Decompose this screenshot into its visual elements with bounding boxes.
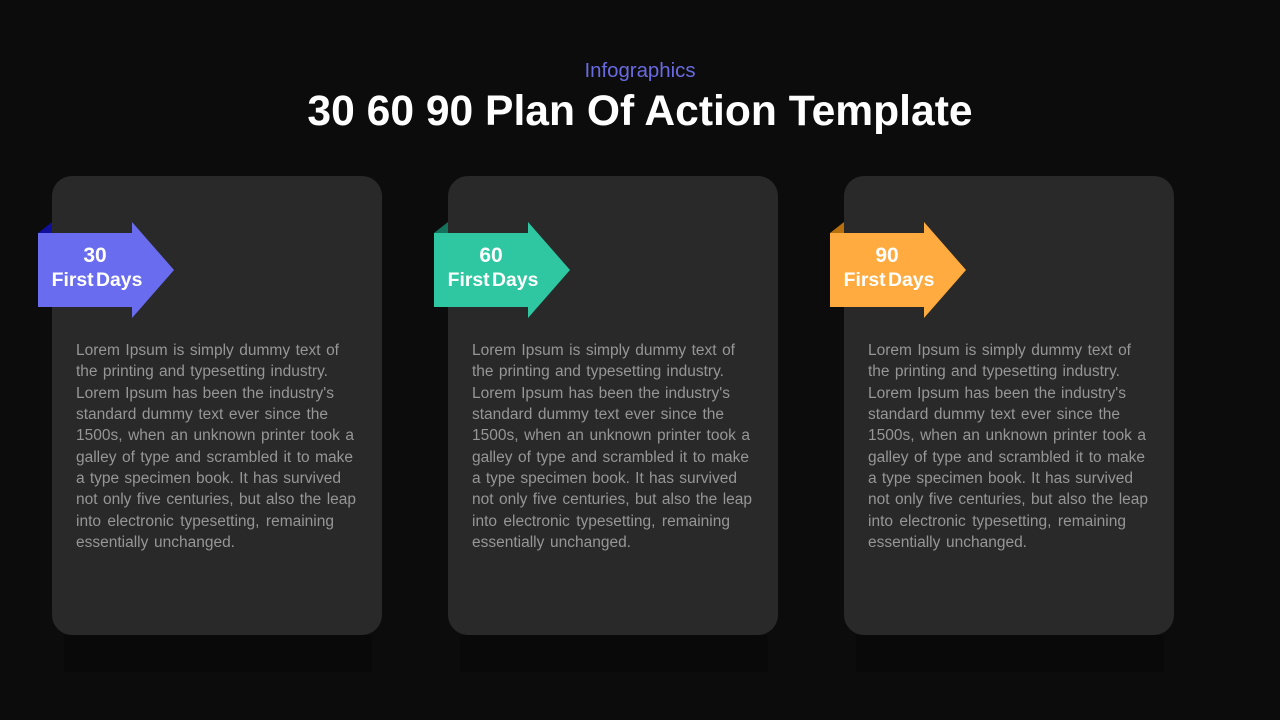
arrow label: First Days <box>448 269 538 291</box>
text block: 90 days: 1500s, when an unknown printer took a <box>868 427 1146 444</box>
text block: 60 days <box>472 342 752 551</box>
arrow: 90 first days <box>830 222 966 318</box>
arrow: 60 first days <box>434 222 570 318</box>
arrow number: 30 <box>83 244 107 267</box>
text block: 60 days: standard dummy text ever since the <box>472 406 724 423</box>
text block: 60 days: not only five centuries, but also the leap <box>472 491 752 508</box>
text block: 30 days: a type specimen book. It has survived <box>76 470 341 487</box>
text block: 60 days: Lorem Ipsum is simply dummy text of <box>472 342 735 359</box>
text block: 60 days: the printing and typesetting industry. <box>472 363 724 380</box>
text block: 30 days: essentially unchanged. <box>76 534 235 551</box>
text block: 90 days: Lorem Ipsum has been the industry's <box>868 385 1126 402</box>
panel: 60 days <box>448 176 778 635</box>
text block: 30 days: into electronic typesetting, remaining <box>76 513 334 530</box>
panel shadow: 60 days <box>460 635 768 672</box>
text block: 90 days: not only five centuries, but also the leap <box>868 491 1148 508</box>
text block: 90 days: essentially unchanged. <box>868 534 1027 551</box>
text block: 30 days: Lorem Ipsum has been the industry's <box>76 385 334 402</box>
panel shadow: 90 days <box>856 635 1164 672</box>
title: 30 60 90 Plan Of Action Template <box>307 87 973 135</box>
text block: 60 days: 1500s, when an unknown printer took a <box>472 427 750 444</box>
arrow label: First Days <box>844 269 934 291</box>
text block: 90 days: galley of type and scrambled it to make <box>868 449 1145 466</box>
text block: 30 days: not only five centuries, but also the leap <box>76 491 356 508</box>
panel: 30 days <box>52 176 382 635</box>
arrow label: First Days <box>52 269 142 291</box>
text block: 90 days: standard dummy text ever since the <box>868 406 1120 423</box>
arrow number: 90 <box>875 244 899 267</box>
text block: 60 days: into electronic typesetting, remaining <box>472 513 730 530</box>
text block: 30 days: 1500s, when an unknown printer took a <box>76 427 354 444</box>
text block: 60 days: galley of type and scrambled it to make <box>472 449 749 466</box>
text block: 60 days: Lorem Ipsum has been the industry's <box>472 385 730 402</box>
panel: 90 days <box>844 176 1174 635</box>
text block: 60 days: essentially unchanged. <box>472 534 631 551</box>
arrow number: 60 <box>479 244 503 267</box>
text block: 90 days: Lorem Ipsum is simply dummy text of <box>868 342 1131 359</box>
panel shadow: 30 days <box>64 635 372 672</box>
text block: 90 days: into electronic typesetting, remaining <box>868 513 1126 530</box>
text block: 30 days: Lorem Ipsum is simply dummy text of <box>76 342 339 359</box>
text block: 30 days: standard dummy text ever since the <box>76 406 328 423</box>
text block: 30 days: the printing and typesetting industry. <box>76 363 328 380</box>
text block: 90 days <box>868 342 1148 551</box>
text block: 30 days <box>76 342 356 551</box>
text block: 30 days: galley of type and scrambled it to make <box>76 449 353 466</box>
text block: 90 days: a type specimen book. It has survived <box>868 470 1133 487</box>
arrow: 30 first days <box>38 222 174 318</box>
text block: 90 days: the printing and typesetting industry. <box>868 363 1120 380</box>
text block: 60 days: a type specimen book. It has survived <box>472 470 737 487</box>
eyebrow heading: Infographics <box>584 60 696 82</box>
